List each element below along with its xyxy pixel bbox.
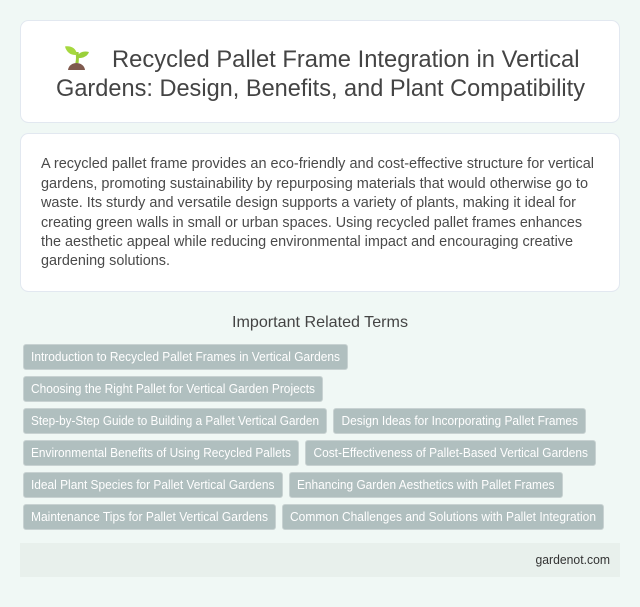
text block: description paragraph: creating green walls in small or urban spaces. Using recycled pallet frames enhances xyxy=(41,214,582,231)
tag: cost-effectiveness xyxy=(306,440,596,466)
tag: environmental benefits xyxy=(24,440,298,466)
footer source text: gardenot.com xyxy=(536,552,610,567)
icon: sprout xyxy=(65,46,89,70)
panel: title card xyxy=(20,20,620,122)
tag: design ideas: Design Ideas for Incorporating Pallet Frames xyxy=(342,413,578,428)
text block: description paragraph: gardens, promoting sustainability by repurposing materials that would otherwise go to xyxy=(41,175,588,192)
tag: choosing pallet: Choosing the Right Pallet for Vertical Garden Projects xyxy=(31,381,315,396)
tag: cost-effectiveness: Cost-Effectiveness of Pallet-Based Vertical Gardens xyxy=(314,445,588,460)
text block: description paragraph: the aesthetic appeal while reducing environmental impact and encouraging creative xyxy=(41,233,573,250)
tag: enhancing aesthetics: Enhancing Garden Aesthetics with Pallet Frames xyxy=(297,477,555,492)
tag: environmental benefits: Environmental Benefits of Using Recycled Pallets xyxy=(31,445,291,460)
text block: description paragraph: A recycled pallet frame provides an eco-friendly and cost-effective structure for vertical xyxy=(41,155,594,172)
tag: step-by-step guide: Step-by-Step Guide to Building a Pallet Vertical Garden xyxy=(31,413,319,428)
panel: related term tags xyxy=(24,344,604,530)
title xyxy=(56,46,586,102)
tag: enhancing aesthetics xyxy=(290,472,562,498)
tag: maintenance tips: Maintenance Tips for Pallet Vertical Gardens xyxy=(31,509,268,524)
tag: ideal plant species xyxy=(24,472,282,498)
title: Recycled Pallet Frame Integration in Vertical xyxy=(112,46,580,73)
tag: maintenance tips xyxy=(24,504,276,530)
heading: important related terms: Important Related Terms xyxy=(232,314,408,331)
tag: choosing pallet xyxy=(24,376,322,402)
tag: introduction: Introduction to Recycled Pallet Frames in Vertical Gardens xyxy=(31,349,340,364)
title: Gardens: Design, Benefits, and Plant Compatibility xyxy=(56,75,586,102)
tag: common challenges: Common Challenges and Solutions with Pallet Integration xyxy=(290,509,596,524)
footer xyxy=(20,543,620,577)
tag: ideal plant species: Ideal Plant Species for Pallet Vertical Gardens xyxy=(31,477,275,492)
panel: description xyxy=(20,134,620,292)
tag: step-by-step guide xyxy=(24,408,326,434)
text block: description paragraph xyxy=(40,155,594,269)
tag: common challenges xyxy=(282,504,604,530)
tag: design ideas xyxy=(334,408,586,434)
tag: introduction xyxy=(24,344,348,370)
text block: description paragraph: gardening solutions. xyxy=(41,252,170,269)
text block: description paragraph: waste. Its sturdy and versatile design supports a variety of plants, making it ideal for xyxy=(40,194,576,211)
